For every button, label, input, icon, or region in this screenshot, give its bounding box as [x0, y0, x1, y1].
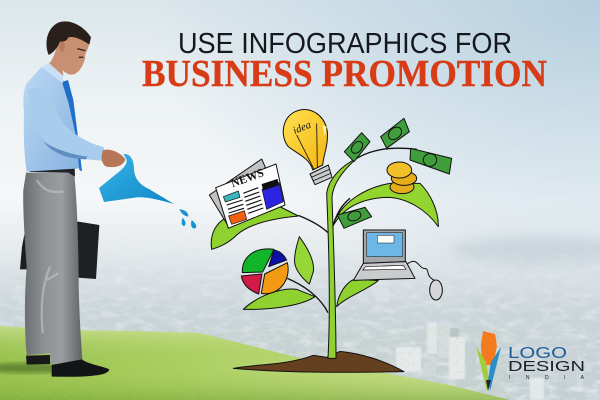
newspaper: [209, 159, 285, 228]
logo: Logo Design India: [476, 331, 585, 391]
leaf upper left: [211, 205, 298, 249]
watering can: [99, 154, 174, 204]
money bills: [337, 118, 452, 228]
shirt: [23, 67, 80, 172]
businessman watering the plant: [20, 21, 196, 377]
gold coins: [387, 162, 417, 194]
plant with marketing icons: [209, 110, 452, 372]
belt: [28, 168, 75, 177]
collar: [42, 63, 63, 83]
idea light bulb: [283, 110, 332, 185]
leaf lower right: [337, 279, 378, 307]
ear: [59, 42, 65, 52]
title line 2: BUSINESS PROMOTION: [142, 53, 547, 95]
neck and face: [49, 36, 89, 76]
soil: [233, 351, 404, 372]
leaf lower left: [243, 289, 315, 309]
title line 1: USE INFOGRAPHICS FOR: [178, 28, 512, 60]
idea light bulb: idea: [292, 120, 313, 137]
briefcase: [20, 216, 99, 279]
DESIGN wordmark: DESIGN: [508, 359, 585, 375]
branches: [287, 148, 417, 313]
stem: [327, 158, 357, 358]
eye and brow: [77, 49, 85, 57]
laptop and mouse: [353, 230, 442, 300]
grass hill: [0, 326, 510, 400]
INDIA wordmark: I N D I A: [509, 375, 585, 381]
torch icon: [476, 331, 501, 391]
shoes: [26, 355, 109, 377]
tie: [62, 80, 82, 171]
hair: [46, 21, 91, 55]
trouser folds: [37, 180, 63, 333]
title: [142, 28, 547, 95]
trousers: [23, 173, 83, 364]
LOGO wordmark: LOGO: [508, 345, 567, 362]
arm: [28, 87, 104, 161]
water drops: [179, 209, 196, 229]
leaf centre: [294, 237, 314, 284]
newspaper: NEWS: [229, 165, 266, 190]
hand: [102, 150, 125, 167]
leaf upper right: [333, 183, 438, 227]
pie chart: [241, 249, 288, 294]
